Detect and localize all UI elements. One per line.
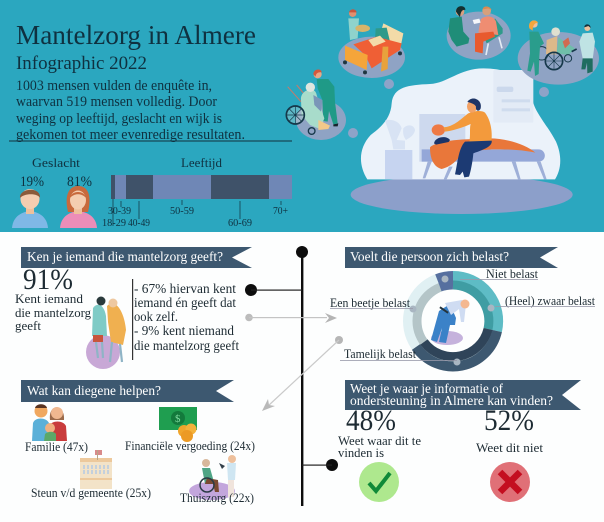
big number 52%: 52% (484, 404, 534, 437)
banner heading (345, 247, 558, 268)
age bar chart (102, 175, 292, 229)
details text: ook zelf. (134, 309, 178, 324)
banner heading: Weet je waar je informatie of (350, 381, 503, 396)
icon: red cross (490, 462, 530, 502)
age bar chart: 18-29 (102, 218, 126, 229)
bubble: hospital bed (338, 9, 405, 78)
icon: woman (60, 186, 97, 228)
male percentage: 19% (20, 174, 44, 190)
label: die mantelzorg (15, 305, 91, 320)
thought dot 3 (539, 87, 549, 97)
intro text: 1003 mensen vulden de enquête in, (16, 78, 212, 94)
label: knows: Weet waar dit te (338, 433, 421, 448)
label: familie: Familie (47x) (25, 439, 88, 454)
label: does not know: Weet dit niet (476, 440, 543, 455)
icon: municipal building (80, 450, 112, 489)
big number 91%: 91% (23, 263, 73, 296)
thought dot 2 (384, 79, 394, 89)
header panel (0, 0, 604, 232)
icon: green check (359, 462, 399, 502)
intro text: weging op leeftijd, geslacht en wijk is (16, 111, 222, 127)
banner heading: Wat kan diegene helpen? (27, 383, 161, 398)
label: tamelijk belast (340, 347, 457, 361)
arrow: to help section (262, 336, 343, 411)
label (15, 291, 91, 333)
age bar chart: 60-69 (228, 218, 252, 229)
bubble: wheelchair (286, 70, 346, 140)
donut chart (408, 276, 498, 366)
banner heading (21, 247, 252, 268)
label: tamelijk belast: Tamelijk belast (344, 347, 416, 361)
icon: money and coins: $ (175, 413, 181, 425)
icon: man (12, 189, 48, 228)
title: Mantelzorg in Almere (16, 20, 256, 50)
label: Kent iemand (15, 291, 83, 306)
age bar chart: 30-39 (108, 206, 131, 217)
subtitle: Infographic 2022 (16, 53, 147, 74)
banner heading (21, 380, 234, 402)
icon: home care (189, 455, 236, 500)
female percentage: 81% (67, 174, 92, 190)
gender heading: Geslacht (32, 156, 81, 170)
panel: what can help (21, 380, 255, 505)
label: niet belast: Niet belast (486, 267, 538, 281)
age bar chart: 40-49 (128, 218, 150, 229)
details text (134, 281, 239, 353)
label: zwaar belast: (Heel) zwaar belast (505, 294, 595, 308)
banner heading (345, 380, 581, 410)
timeline (245, 246, 338, 506)
details text: die mantelzorg geeft (134, 338, 239, 353)
icon: family (32, 404, 67, 441)
banner heading: ondersteuning in Almere kan vinden? (350, 393, 553, 408)
intro text (16, 78, 245, 143)
bubble: doctor and wheelchair (518, 20, 599, 85)
banner heading: Voelt die persoon zich belast? (350, 249, 509, 264)
details text: - 9% kent niemand (134, 323, 234, 338)
intro text: waarvan 519 mensen volledig. Door (16, 94, 217, 110)
icon: bent-over person (431, 300, 470, 345)
bubble: conversation (447, 6, 511, 60)
panel: finding information (338, 380, 581, 502)
age bar chart: 70+ (273, 206, 288, 217)
label: knows: vinden is (338, 445, 384, 460)
details text: - 67% hiervan kent (134, 281, 236, 296)
arrow: to burden section (245, 313, 337, 323)
details text: iemand én geeft dat (134, 295, 236, 310)
icon: money and coins (159, 407, 197, 442)
label: knows (338, 433, 421, 460)
panel: burden (330, 247, 595, 366)
label: niet belast (460, 267, 538, 281)
big number 48%: 48% (346, 404, 396, 437)
label: municipal support: Steun v/d gemeente (25x) (31, 485, 151, 500)
panel: know a carer (15, 247, 252, 369)
label: financial compensation: Financiële vergoeding (24x) (125, 438, 255, 453)
thought dot 1 (348, 128, 358, 138)
icon: carer with elderly person (86, 296, 126, 369)
age bar chart: 50-59 (170, 206, 194, 217)
age heading: Leeftijd (181, 156, 223, 170)
intro text: gekomen tot meer evenredige resultaten. (16, 127, 245, 143)
label: home care: Thuiszorg (22x) (180, 490, 254, 505)
marker dots (410, 276, 494, 366)
label: een beetje belast: Een beetje belast (330, 296, 410, 310)
label: geeft (15, 318, 41, 333)
banner heading: Ken je iemand die mantelzorg geeft? (27, 249, 223, 264)
illustration: carer at bedside (351, 68, 573, 214)
